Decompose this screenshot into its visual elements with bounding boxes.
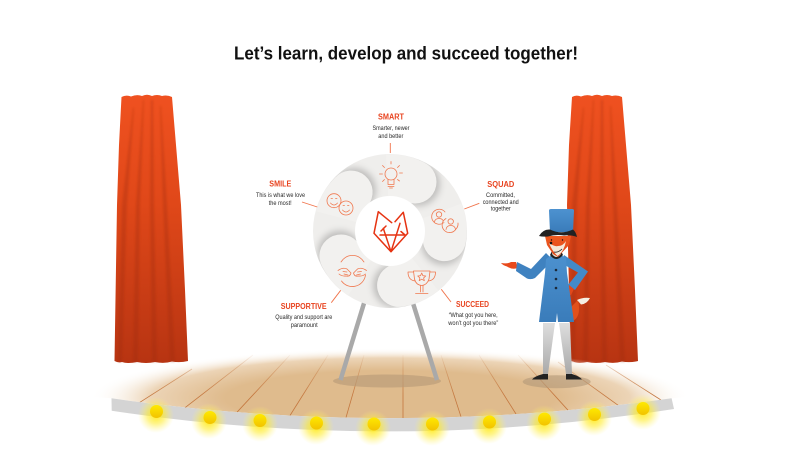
- callout: squad: together: [491, 206, 511, 212]
- callout: smart: [372, 112, 410, 153]
- stage lights: [138, 394, 661, 446]
- callout: squad: Committed,: [486, 192, 515, 199]
- easel shadow: [333, 374, 441, 388]
- icon: smiling faces: [327, 194, 353, 215]
- callout: succeed: SUCCEED: [456, 300, 489, 309]
- callout: supportive: SUPPORTIVE: [281, 302, 327, 311]
- callout: supportive: paramount: [291, 322, 318, 329]
- callout: supportive: Quality and support are: [275, 314, 333, 321]
- easel legs: [340, 300, 437, 380]
- callout: smile: the most!: [269, 200, 292, 207]
- wheel: [313, 154, 467, 308]
- callout: supportive: [275, 290, 341, 329]
- callout: smile: [256, 180, 317, 207]
- title: Let’s learn, develop and succeed together!: [234, 42, 578, 64]
- icon: squad people: [432, 209, 458, 233]
- callout: succeed: “What got you here,: [449, 312, 498, 319]
- callout: smart: and better: [378, 133, 403, 140]
- icon: trophy: [408, 271, 436, 294]
- callout: squad: [464, 180, 519, 212]
- callout: succeed: [441, 289, 498, 327]
- stage floor: [110, 352, 670, 418]
- left curtain: [114, 95, 188, 363]
- callout: squad: SQUAD: [487, 180, 515, 189]
- callout: smart: SMART: [378, 112, 404, 122]
- right curtain: [567, 95, 638, 363]
- callout: smart: Smarter, newer: [372, 125, 410, 132]
- fox logo: [374, 212, 408, 252]
- fox character: [501, 209, 591, 388]
- icon: supportive hands: [338, 255, 366, 287]
- callout: smile: This is what we love: [256, 192, 305, 199]
- icon: light bulb: [380, 162, 402, 188]
- callout: succeed: won’t got you there”: [447, 320, 498, 327]
- callout: squad: connected and: [483, 199, 519, 206]
- callout: smile: SMILE: [269, 180, 292, 188]
- stage front band: [112, 398, 674, 431]
